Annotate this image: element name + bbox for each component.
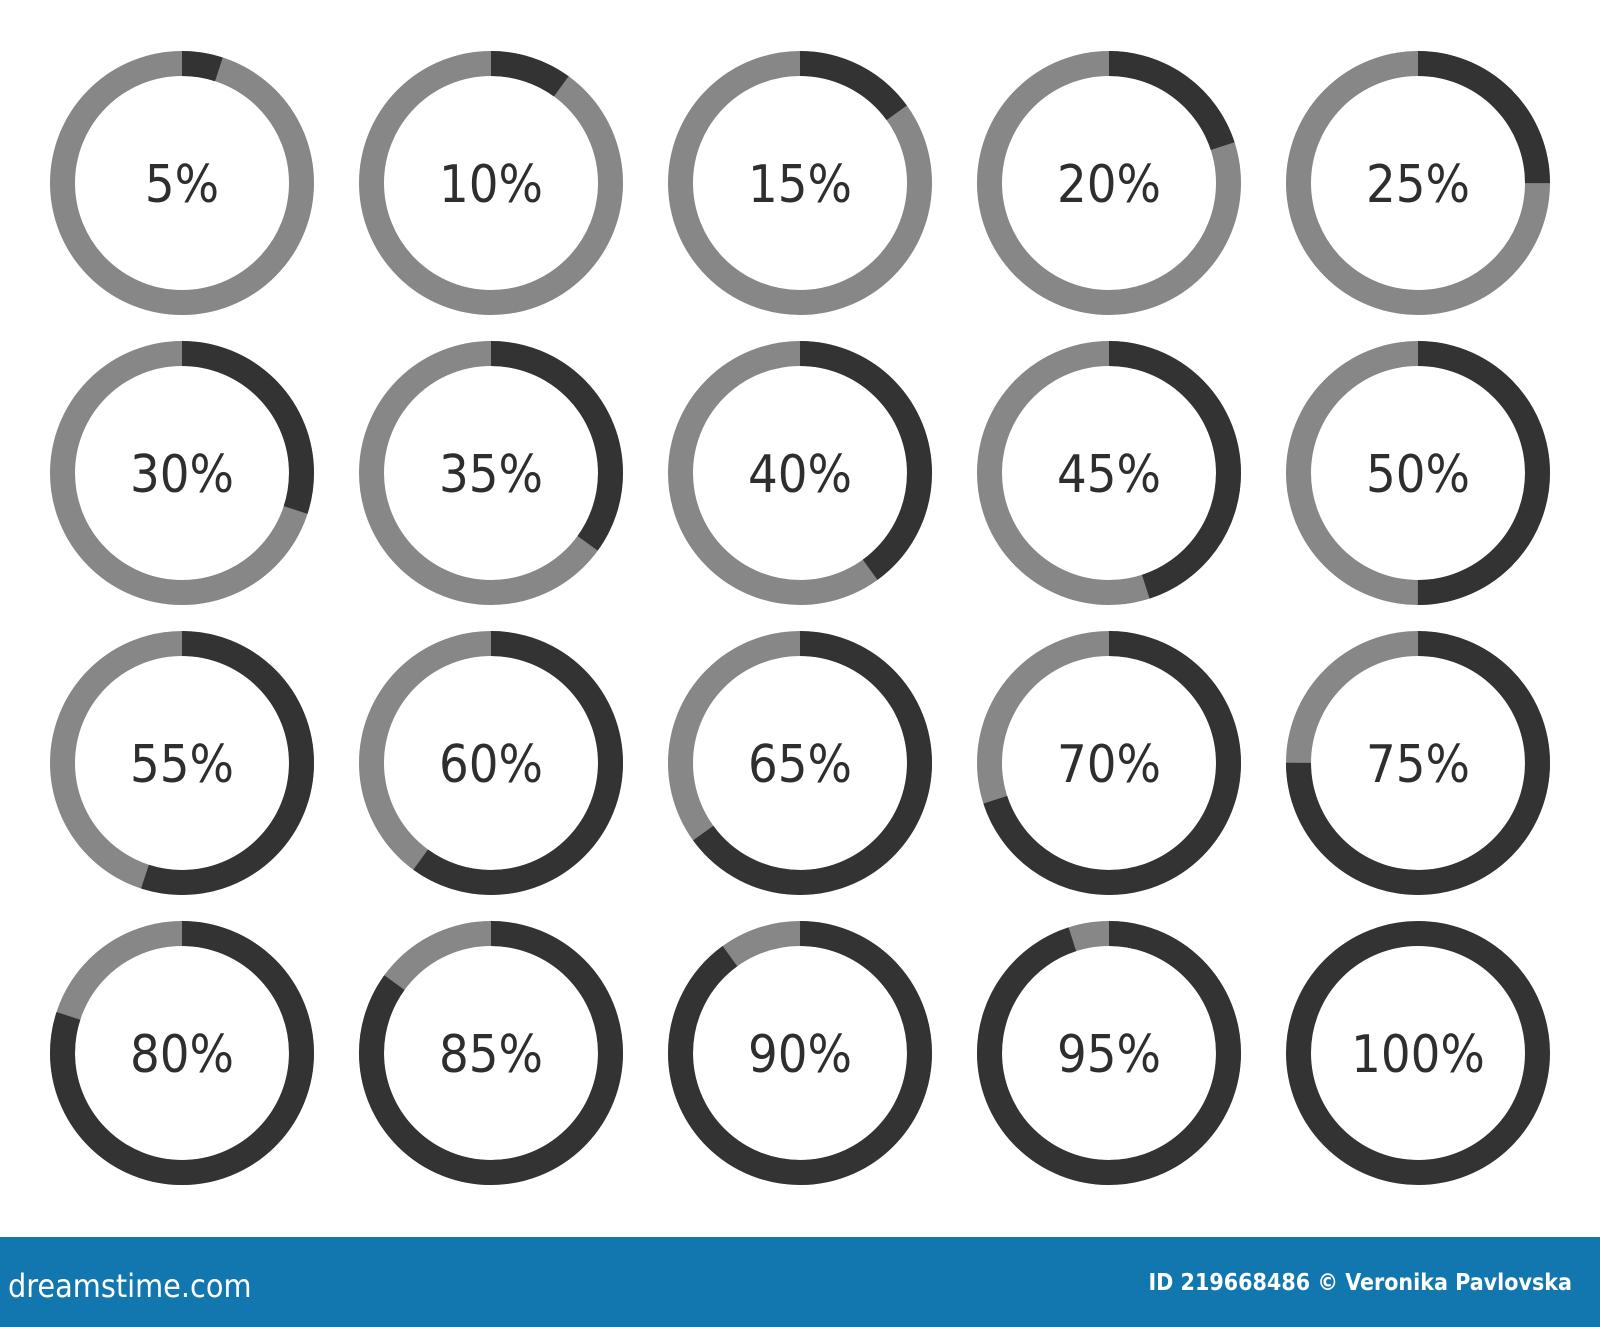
ring 85%: 85%	[439, 1025, 543, 1085]
ring 20%: 20%	[1057, 155, 1161, 215]
ring 75%	[1298, 644, 1538, 882]
ring 15%	[680, 64, 920, 302]
ring 30%	[62, 354, 302, 592]
footer bar	[0, 1237, 1600, 1327]
ring 90%	[680, 934, 920, 1172]
ring 50%	[1298, 354, 1538, 592]
ring 60%	[372, 644, 610, 882]
ring 20%	[990, 64, 1228, 302]
ring 95%	[990, 934, 1228, 1172]
ring 100%: 100%	[1351, 1025, 1485, 1085]
ring 40%	[680, 354, 920, 592]
ring 35%: 35%	[439, 445, 543, 505]
ring 60%: 60%	[439, 735, 543, 795]
ring 75%: 75%	[1366, 735, 1470, 795]
ring 85%	[372, 934, 610, 1172]
ring 10%: 10%	[439, 155, 543, 215]
ring 100%	[1298, 934, 1538, 1172]
footer credit text: ID 219668486 © Veronika Pavlovska	[1148, 1270, 1572, 1296]
ring 95%: 95%	[1057, 1025, 1161, 1085]
ring 30%: 30%	[130, 445, 234, 505]
ring 90%: 90%	[748, 1025, 852, 1085]
ring 80%: 80%	[130, 1025, 234, 1085]
ring 55%	[62, 644, 302, 882]
ring 5%: 5%	[145, 155, 219, 215]
ring 45%: 45%	[1057, 445, 1161, 505]
ring 40%: 40%	[748, 445, 852, 505]
ring 65%	[680, 644, 920, 882]
ring 15%: 15%	[748, 155, 852, 215]
ring 70%	[990, 644, 1228, 882]
ring 5%	[62, 64, 302, 302]
ring 70%: 70%	[1057, 735, 1161, 795]
ring 35%	[372, 354, 610, 592]
ring 45%	[990, 354, 1228, 592]
ring 65%: 65%	[748, 735, 852, 795]
ring 25%	[1298, 64, 1538, 302]
footer logo text: dreamstime.com	[8, 1267, 251, 1305]
ring 55%: 55%	[130, 735, 234, 795]
ring 10%	[372, 64, 610, 302]
ring 80%	[62, 934, 302, 1172]
ring 25%: 25%	[1366, 155, 1470, 215]
ring 50%: 50%	[1366, 445, 1470, 505]
